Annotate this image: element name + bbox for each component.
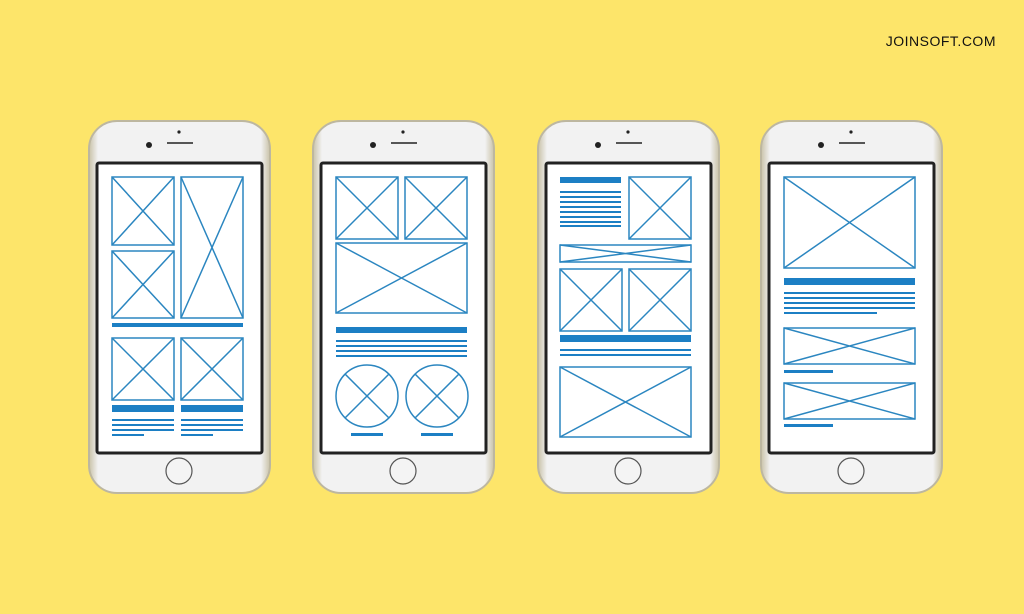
phone 2 [313, 121, 494, 493]
phone 1 [89, 121, 270, 493]
phone 3 [538, 121, 719, 493]
phone 4 [761, 121, 942, 493]
brand text: JOINSOFT.COM [886, 33, 996, 49]
